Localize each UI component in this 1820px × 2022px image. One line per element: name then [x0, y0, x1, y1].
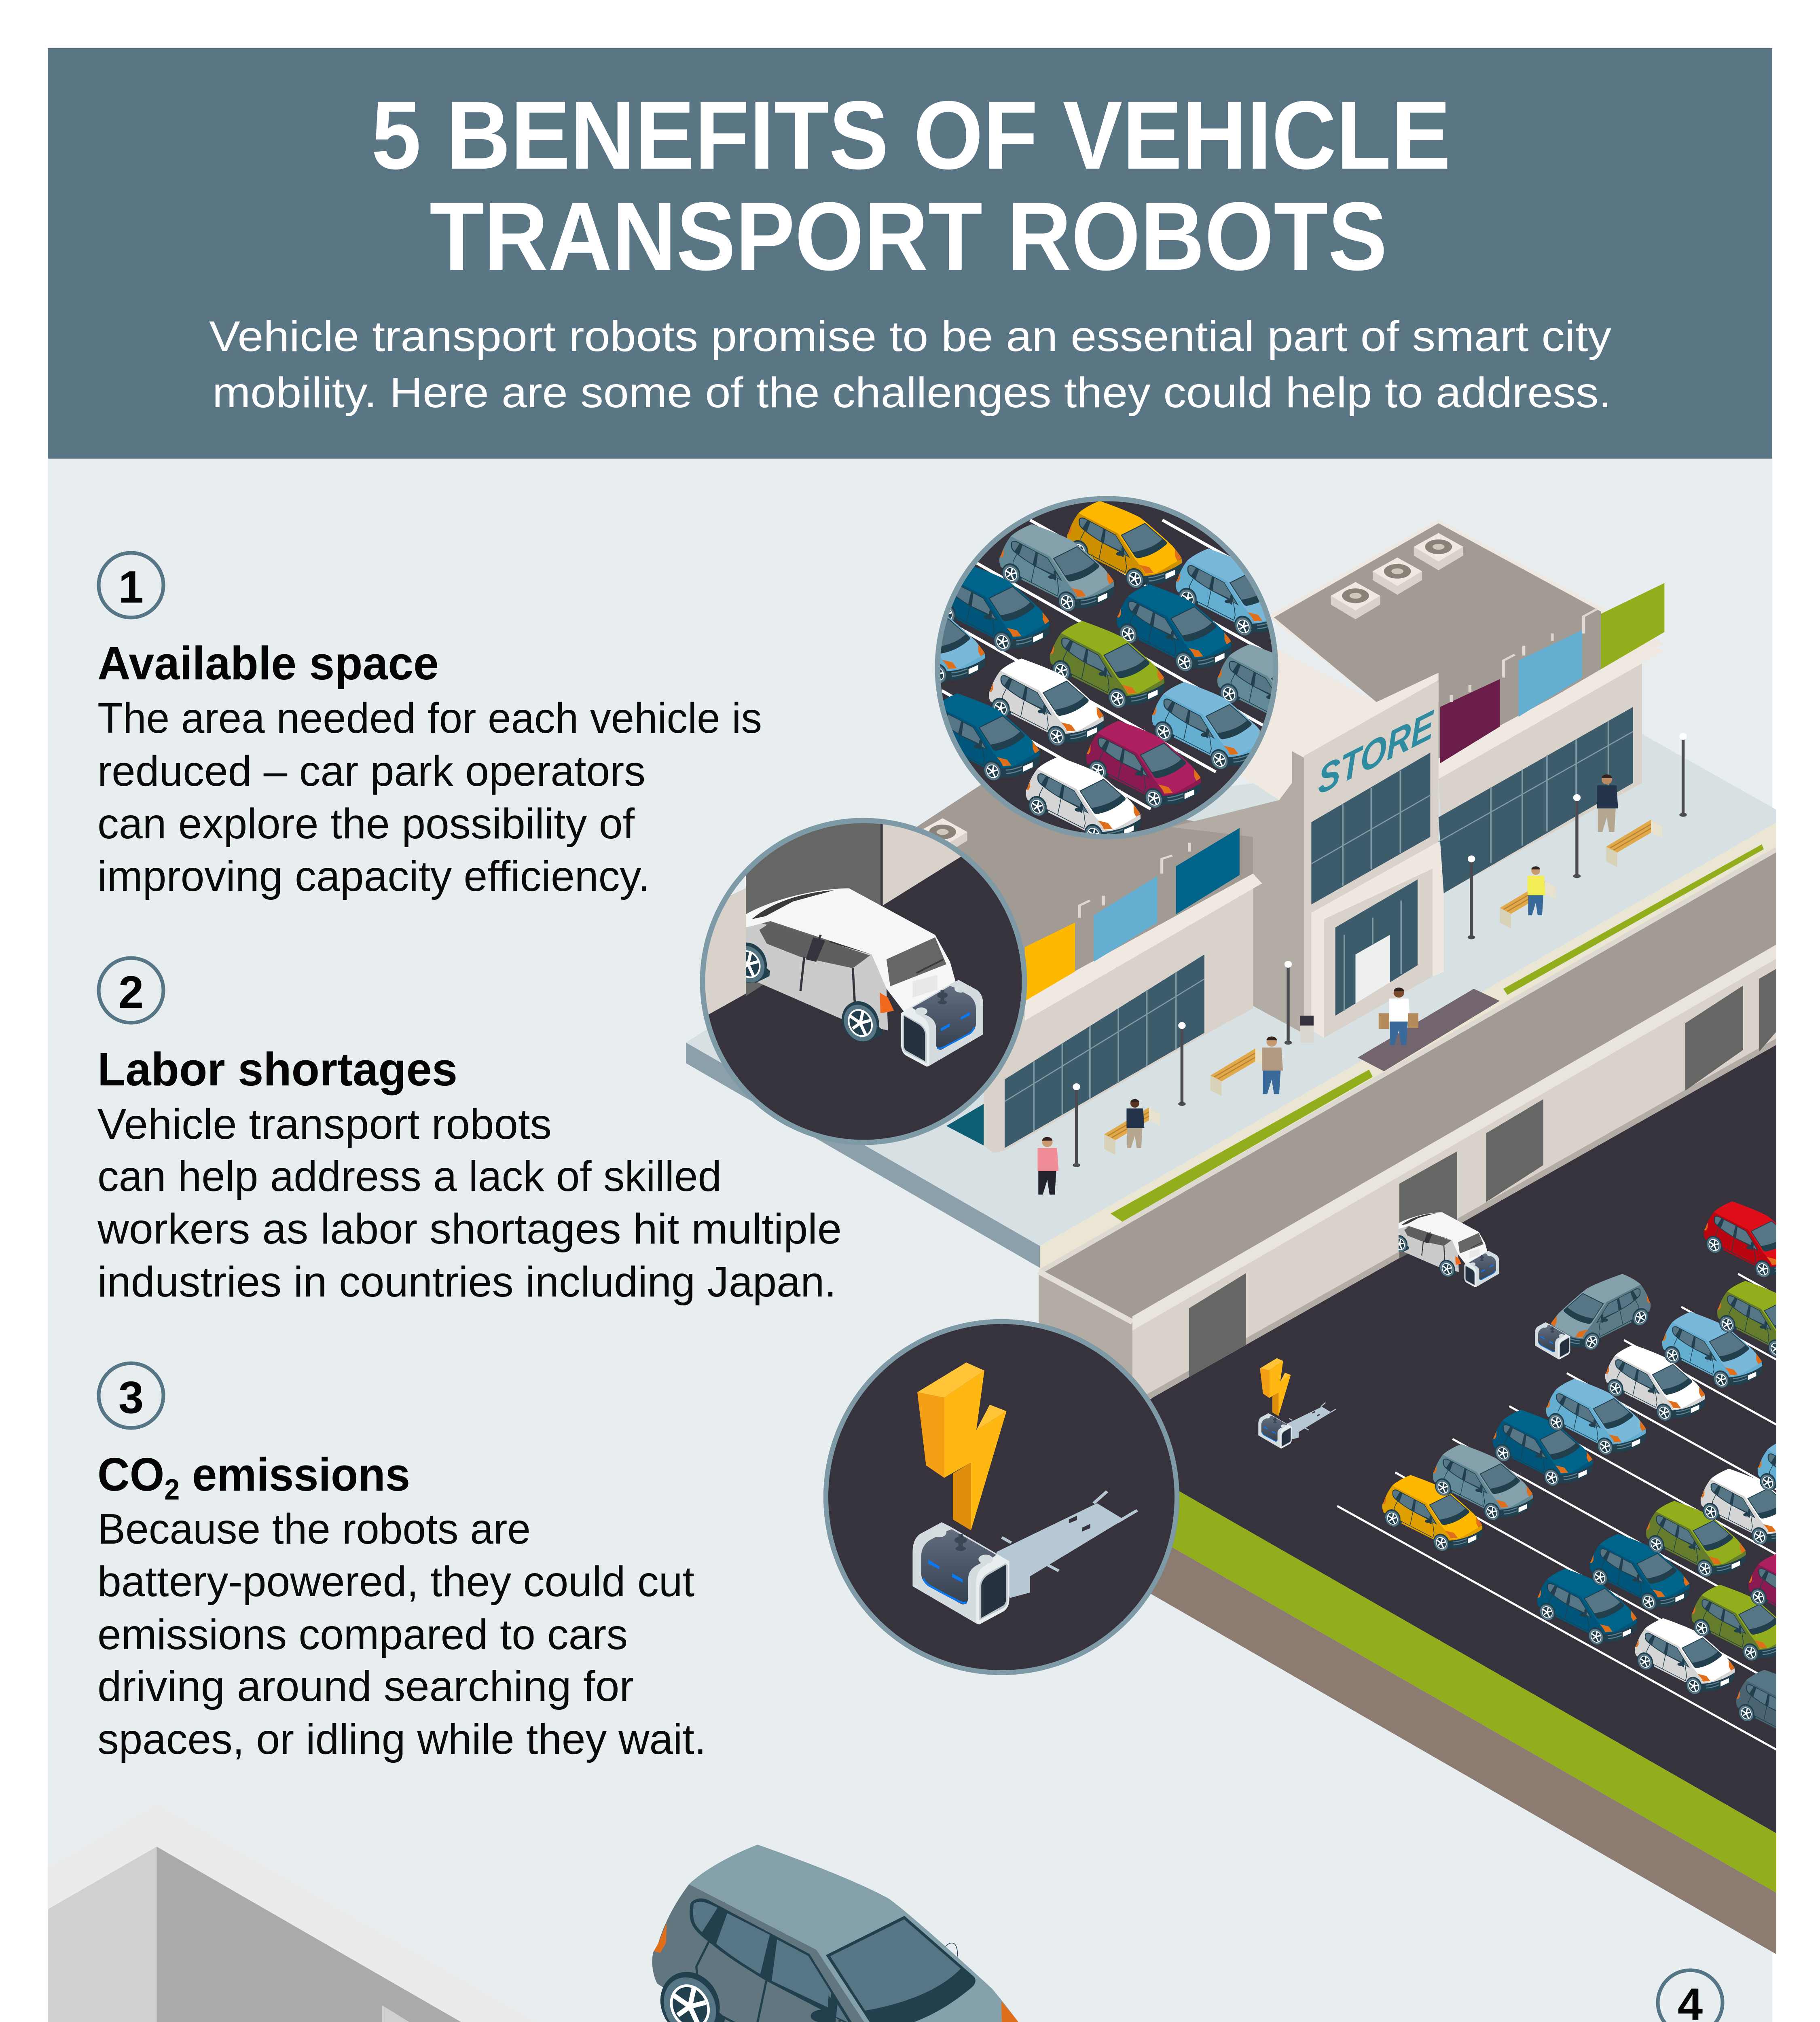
hero grey car with robot — [649, 1844, 1068, 2022]
building: store — [872, 519, 1777, 1195]
number badge 4 — [1658, 1970, 1723, 2022]
benefit 2: labor shortages: can help address a lack of skilled — [97, 1153, 722, 1200]
benefit 2: labor shortages: industries in countries including Japan. — [97, 1258, 836, 1306]
parking lot cars — [1337, 1201, 1820, 1750]
benefit 1: available space — [97, 553, 762, 900]
number badge 2: 2 — [119, 967, 144, 1017]
small robot with charging bolt — [1258, 1358, 1336, 1449]
benefit 3: CO2 emissions: driving around searching for — [97, 1662, 634, 1710]
lamps, benches — [1073, 733, 1687, 1167]
benefit 1: available space: can explore the possibility of — [97, 800, 635, 848]
asphalt and embankment — [1072, 1045, 1777, 1954]
pavement — [686, 734, 1777, 1272]
car: row 3 — [1634, 1554, 1820, 1749]
benefit 3: CO2 emissions: Because the robots are — [97, 1505, 531, 1553]
car being moved by robot — [1535, 1274, 1651, 1360]
benefit 3: CO2 emissions: battery-powered, they could cut — [97, 1558, 694, 1605]
number badge 2 — [99, 958, 163, 1023]
number badge 3: 3 — [119, 1372, 144, 1423]
benefit 2: labor shortages — [97, 958, 842, 1306]
car: row 2 — [1536, 1439, 1820, 1648]
circle: dense parked cars — [870, 497, 1332, 847]
store signs — [1025, 583, 1664, 1001]
title: TRANSPORT ROBOTS — [430, 182, 1387, 290]
circle: charging robot — [823, 1319, 1179, 1675]
benefit 4: worker safety — [1023, 1970, 1725, 2022]
benefit 3: CO2 emissions: 2 — [164, 1474, 180, 1506]
title: 5 BENEFITS OF VEHICLE — [371, 81, 1451, 189]
benefit 2: labor shortages: Vehicle transport robots — [97, 1100, 552, 1148]
benefit 1: available space: The area needed for each vehicle is — [97, 694, 762, 742]
benefit 3: CO2 emissions: emissions compared to cars — [97, 1611, 628, 1658]
benefit 3: CO2 emissions: spaces, or idling while they wait. — [97, 1715, 706, 1763]
illustration: store and car park — [686, 519, 1820, 1954]
benefit 2: labor shortages: workers as labor shortages hit multiple — [97, 1205, 842, 1253]
circle: robot carrying white car — [684, 817, 1026, 1144]
number badge 1 — [99, 553, 163, 618]
benefit 2: labor shortages: Labor shortages — [97, 1043, 457, 1096]
parking bay lines — [1337, 1222, 1778, 1750]
subtitle: mobility. Here are some of the challenges they could help to address. — [212, 369, 1611, 417]
benefit 3: CO2 emissions — [97, 1363, 706, 1763]
store sign text: STORE — [1318, 701, 1434, 804]
title — [371, 81, 1451, 290]
subtitle — [209, 313, 1611, 417]
header banner — [48, 48, 1772, 459]
car park wall — [1039, 849, 1777, 1409]
scene: port 3 garage — [48, 1804, 820, 2022]
white car leaving gate with robot — [1389, 1212, 1499, 1287]
pedestrians — [1037, 774, 1618, 1195]
car: row 1 — [1382, 1201, 1817, 1554]
benefit 1: available space: Available space — [97, 637, 439, 690]
benefit 1: available space: reduced – car park operators — [97, 747, 645, 795]
number badge 1: 1 — [119, 562, 144, 612]
main background panel — [48, 459, 1772, 2022]
benefit 3: CO2 emissions: emissions — [180, 1448, 410, 1501]
number badge 3 — [99, 1363, 163, 1428]
benefit 1: available space: improving capacity efficiency. — [97, 852, 650, 900]
subtitle: Vehicle transport robots promise to be an essential part of smart city — [209, 313, 1611, 360]
benefit 3: CO2 emissions: CO — [97, 1448, 168, 1501]
